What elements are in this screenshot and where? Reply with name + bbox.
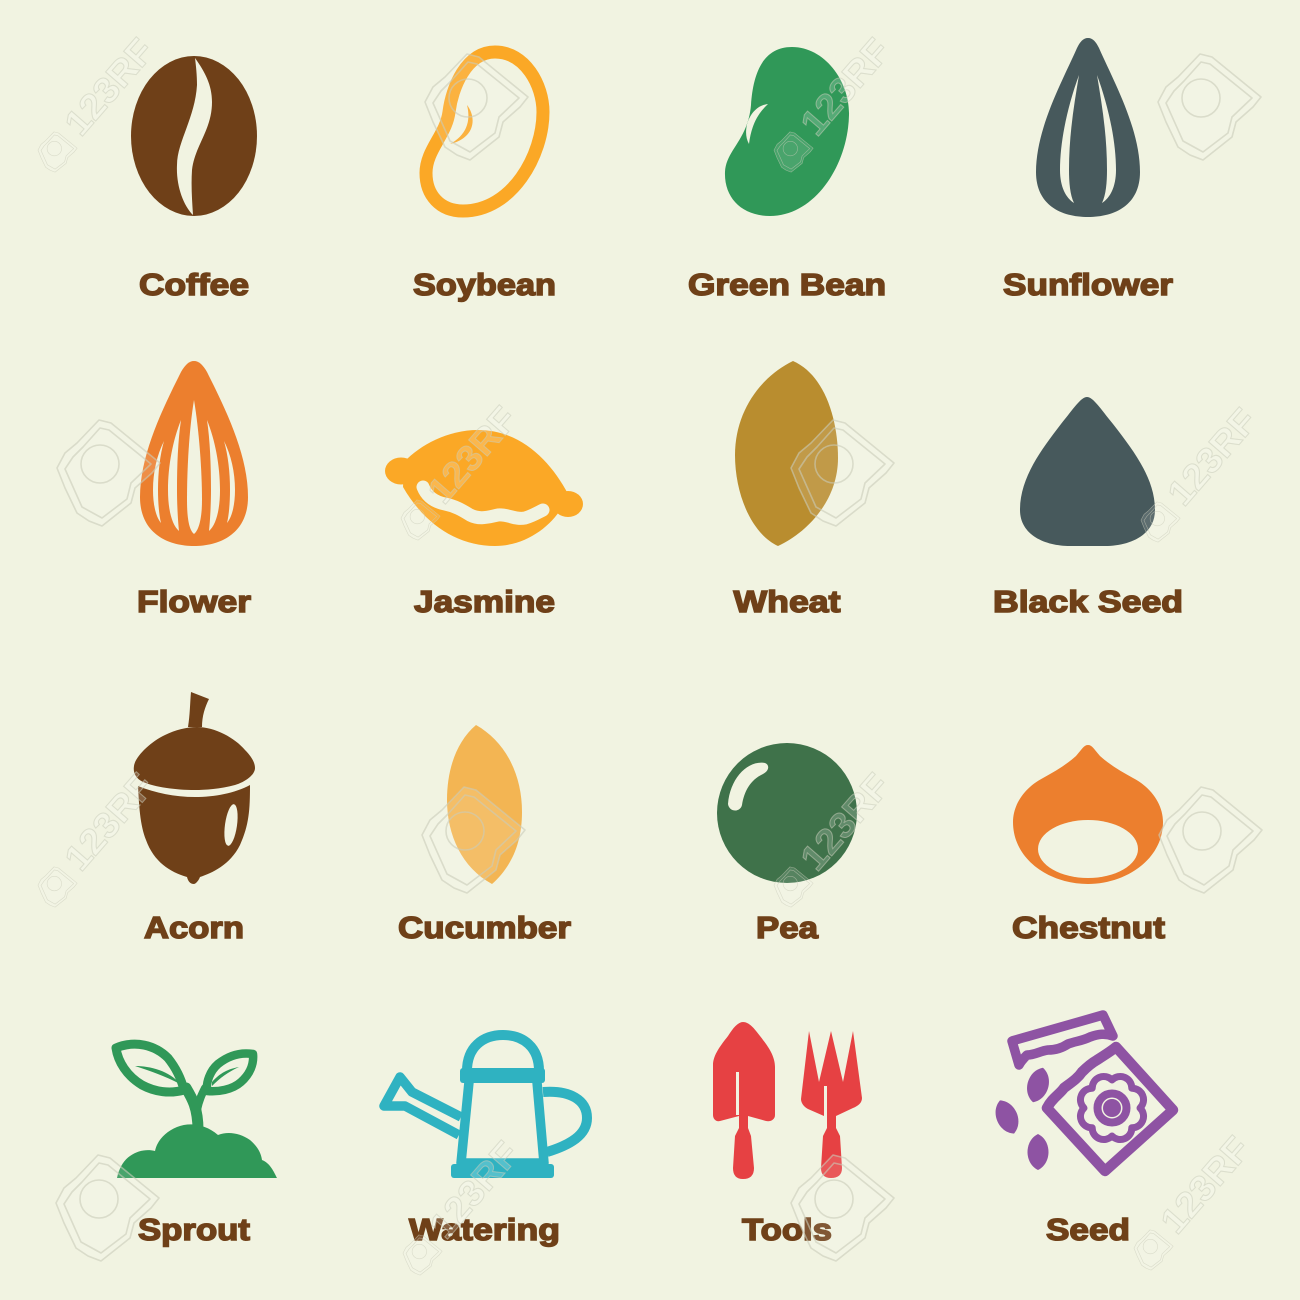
item: wheat xyxy=(734,361,840,619)
icon: black seed xyxy=(1020,397,1155,546)
icon: soybean xyxy=(426,52,543,211)
label: cucumber: Cucumber xyxy=(398,910,571,945)
watermarks: 123RF xyxy=(56,30,162,143)
item: watering xyxy=(384,1035,587,1247)
item: chestnut xyxy=(1012,745,1165,945)
watermarks: 123RF xyxy=(1152,1128,1258,1241)
label: acorn: Acorn xyxy=(144,910,244,945)
label: coffee: Coffee xyxy=(139,267,249,302)
item: black seed xyxy=(993,397,1183,619)
icon: cucumber seed xyxy=(447,725,522,884)
item: flower xyxy=(137,361,251,619)
item: jasmine xyxy=(385,430,583,619)
icon: acorn xyxy=(134,692,255,884)
label: flower: Flower xyxy=(137,584,251,619)
item: soybean xyxy=(413,52,556,302)
icon: coffee bean xyxy=(131,56,257,216)
watermarks: 123RF xyxy=(421,1133,527,1246)
icon: flower seed xyxy=(140,361,248,546)
label: jasmine: Jasmine xyxy=(414,584,555,619)
item: acorn xyxy=(134,692,255,945)
icon: seed packet xyxy=(990,1015,1173,1171)
icon: wheat seed xyxy=(735,361,838,546)
icon: watering can xyxy=(384,1035,587,1178)
icon: jasmine seed xyxy=(385,430,583,546)
item: seed xyxy=(990,1015,1173,1247)
item: cucumber xyxy=(398,725,571,945)
item: pea xyxy=(717,743,857,945)
label: pea: Pea xyxy=(756,910,819,945)
item: coffee xyxy=(131,56,257,302)
label: seed: Seed xyxy=(1046,1212,1130,1247)
label: watering: Watering xyxy=(409,1212,560,1247)
watermarks: 123RF xyxy=(419,398,525,511)
watermarks: 123RF xyxy=(792,30,898,143)
icon: chestnut xyxy=(1013,745,1163,884)
item: green bean xyxy=(688,47,886,302)
item: tools xyxy=(713,1022,862,1247)
icon: sprout xyxy=(116,1044,277,1178)
label: sunflower: Sunflower xyxy=(1003,267,1173,302)
icon: green bean xyxy=(725,47,849,216)
label: sprout: Sprout xyxy=(138,1212,250,1247)
icon: pea xyxy=(717,743,857,883)
watermarks: 123RF xyxy=(1159,400,1265,513)
label: soybean: Soybean xyxy=(413,267,556,302)
item: sunflower xyxy=(1003,38,1173,302)
item: sprout xyxy=(116,1044,277,1247)
icon: sunflower seed xyxy=(1036,38,1140,217)
label: wheat: Wheat xyxy=(734,584,840,619)
icon: trowel and fork xyxy=(713,1022,862,1179)
label: green bean: Green Bean xyxy=(688,267,886,302)
watermarks: 123RF xyxy=(56,765,162,878)
label: tools: Tools xyxy=(742,1212,832,1247)
watermarks: 123RF xyxy=(792,765,898,878)
label: black seed: Black Seed xyxy=(993,584,1183,619)
label: chestnut: Chestnut xyxy=(1012,910,1165,945)
